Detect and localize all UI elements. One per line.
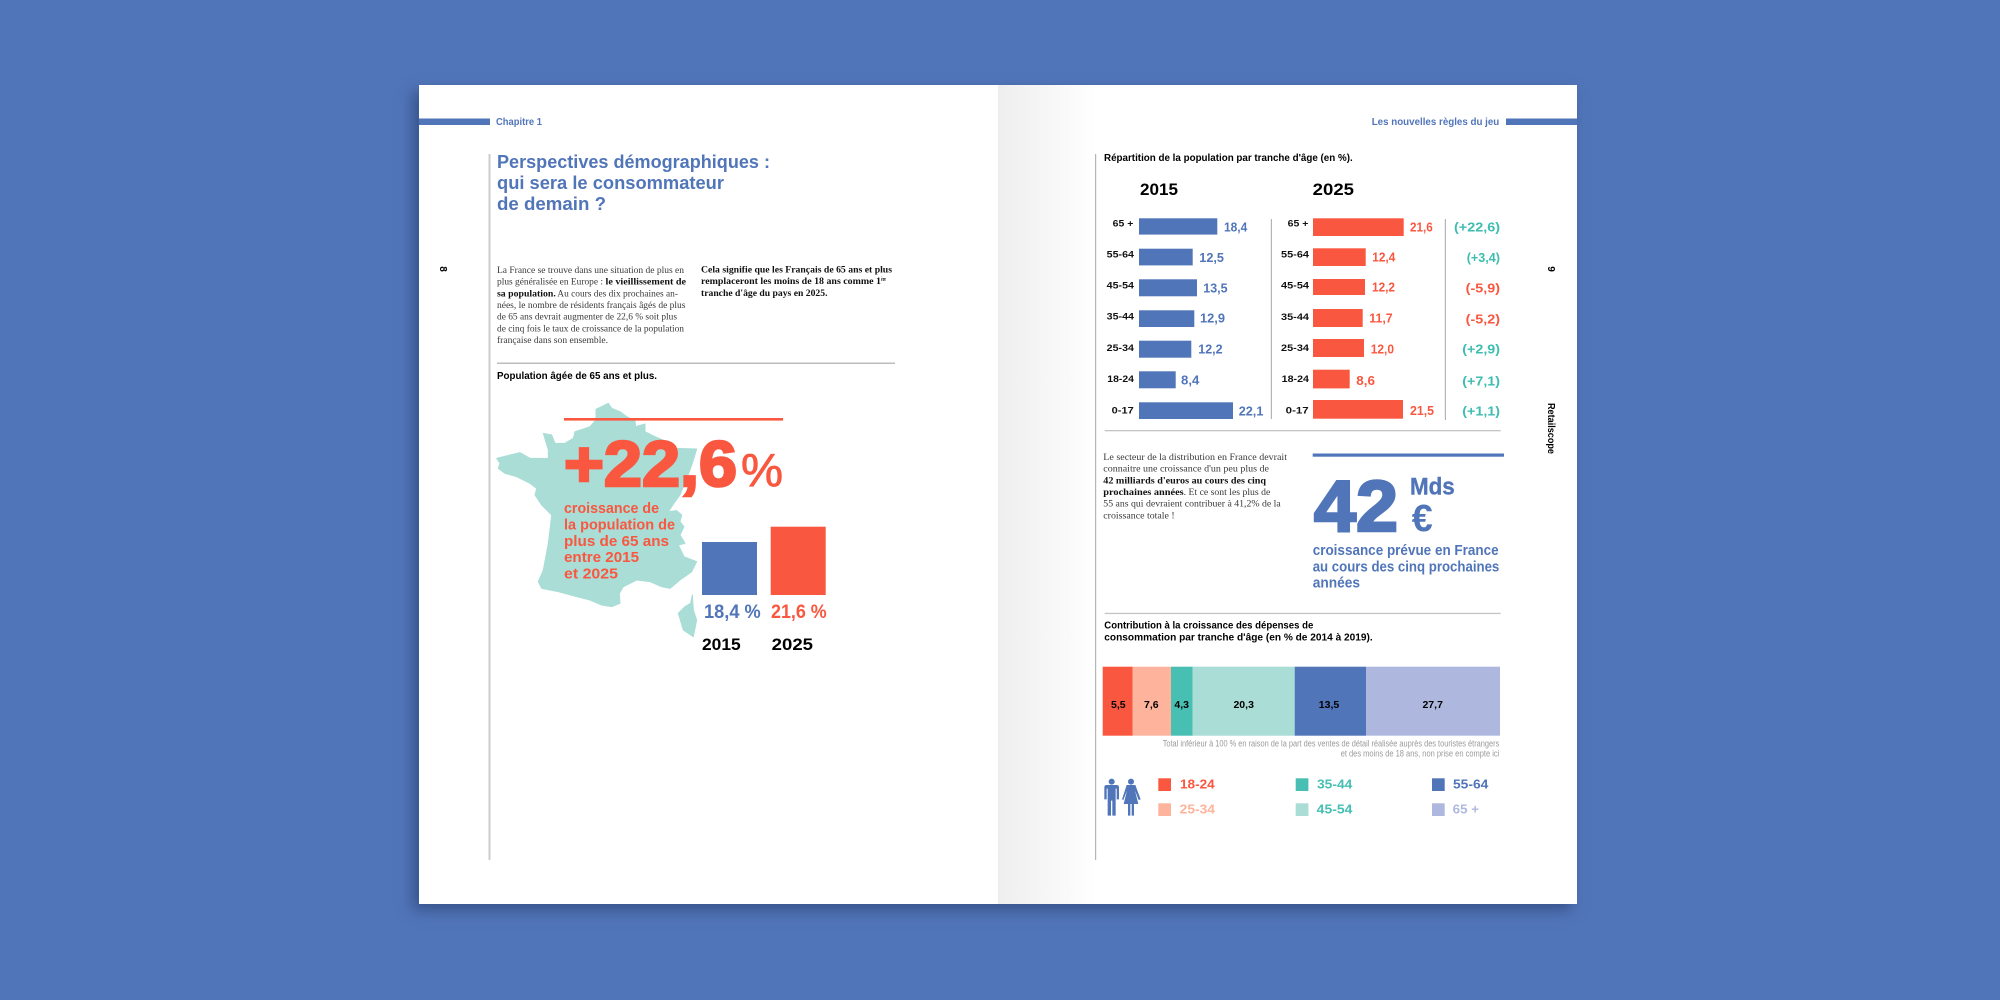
intro text block: plus généralisée en Europe : [497,278,603,288]
intro bold statement: ère [881,277,886,283]
stacked bar chart: 5,5 [1111,699,1126,711]
bar chart: 2025: 55-64 [1281,250,1310,261]
bar chart: 2025: 45-54 [1281,281,1310,292]
divider right bottom [1105,613,1501,614]
change column [1454,220,1500,418]
bar chart: 2025: 25-34 [1281,343,1310,354]
retail text block: prochaines années [1103,488,1184,498]
callout: +22,6% [564,418,783,500]
bar chart: 2015: 18,4 [1224,219,1248,234]
bar chart: 2015: 25-34 [1107,343,1135,354]
heading: contribution chart: Contribution à la croissance des dépenses de [1104,620,1313,632]
intro text block: le vieillissement de [606,278,686,288]
bar chart: 2025: 12,2 [1372,280,1395,295]
left page header: Chapitre 1 [496,117,542,128]
intro text block: de cinq fois le taux de croissance de la population [497,323,684,334]
left page title: de demain ? [497,193,606,214]
bar chart: 65+ share 2015 vs 2025: 2015 [702,635,741,654]
retail text block: 42 milliards d'euros au cours des cinq [1103,476,1267,486]
change column: (-5,2) [1466,311,1500,326]
callout caption [564,501,675,582]
bar chart: 2025: 21,5 [1410,403,1434,418]
change column: (+22,6) [1454,220,1500,235]
stacked bar chart: 4,3 [1174,699,1189,711]
bar chart: 2015: 2015 [1140,180,1178,199]
stacked bar chart: 27,7 [1422,699,1443,711]
callout: 42 Mds €: croissance prévue en France [1313,542,1499,559]
intro text block [497,266,686,346]
callout: 42 Mds € [1313,454,1504,591]
legend: 45-54 [1317,802,1352,816]
stacked bar chart: 7,6 [1144,699,1159,711]
page number 8: 8 [437,266,448,272]
callout caption: croissance de [564,501,659,517]
heading: contribution chart: consommation par tranche d'âge (en % de 2014 à 2019). [1104,631,1373,643]
legend: 18-24 [1180,777,1215,791]
bar chart: 2015: 13,5 [1203,281,1228,296]
bar chart: 65+ share 2015 vs 2025 [702,527,827,654]
divider left [497,362,895,364]
retail text block: connaitre une croissance d'un peu plus de [1103,465,1269,475]
right page vertical rule [1095,154,1096,860]
change column: (+7,1) [1462,373,1500,388]
intro text block: Au cours des dix prochaines an- [557,289,678,299]
heading: population aged 65+: Population âgée de 65 ans et plus. [497,370,657,382]
page sheet [419,85,1577,904]
intro text block: nées, le nombre de résidents français âgés de plus [497,300,686,311]
footnote: et des moins de 18 ans, non prise en compte ici [1341,748,1499,758]
retail text block: 55 ans qui devraient contribuer à 41,2% de la [1103,500,1282,510]
left page title: Perspectives démographiques : [497,151,770,172]
callout caption: entre 2015 [564,550,639,566]
callout: 42 Mds €: années [1313,574,1360,591]
stacked bar chart: 13,5 [1319,699,1339,711]
stacked bar chart: 20,3 [1233,699,1254,711]
footnote [1163,738,1500,758]
legend: 25-34 [1180,802,1215,816]
bar chart: 65+ share 2015 vs 2025: 21,6 % [771,602,827,623]
callout caption: plus de 65 ans [564,534,669,550]
map of France [497,403,697,637]
callout: 42 Mds €: € [1412,498,1433,540]
intro text block: La France se trouve dans une situation de plus en [497,266,684,276]
divider right top [1105,430,1501,431]
intro text block: de 65 ans devrait augmenter de 22,6 % soit plus [497,313,677,323]
bar chart: 2015 [1107,180,1263,419]
brand label: Retailscope [1545,403,1557,454]
retail text block: Le secteur de la distribution en France devrait [1103,453,1287,463]
intro text block: sa population. [497,289,556,299]
bar chart: 2025: 12,4 [1372,250,1396,265]
bar chart: 2015: 65 + [1113,219,1134,230]
bar chart: 65+ share 2015 vs 2025: 2025 [772,635,813,654]
intro bold statement: remplaceront les moins de 18 ans comme 1 [701,277,881,287]
retail text block [1103,453,1287,521]
right page header: Les nouvelles règles du jeu [1372,117,1499,128]
bar chart: 2025: 21,6 [1410,220,1433,235]
bar chart: 2025: 8,6 [1356,373,1375,388]
change column: (-5,9) [1466,280,1500,295]
bar chart: 2025: 11,7 [1369,311,1393,326]
bar chart: 2025: 12,0 [1371,341,1394,356]
icon: man and woman [1104,779,1141,816]
legend: 35-44 [1317,777,1352,791]
heading: distribution by age: Répartition de la population par tranche d'âge (en %). [1104,152,1353,164]
bar chart: 2025: 0-17 [1286,405,1309,416]
retail text block: . Et ce sont les plus de [1184,488,1270,498]
callout: +22,6%: % [741,444,783,496]
callout: 42 Mds €: Mds [1410,473,1455,500]
callout: 42 Mds €: 42 [1314,467,1398,547]
stacked bar chart [1103,667,1500,736]
left page header [419,117,542,128]
intro bold statement [701,266,892,299]
bar chart: 2015: 35-44 [1107,312,1135,323]
bar chart: 2025: 18-24 [1282,374,1310,385]
bar chart: 2025: 2025 [1313,180,1354,199]
bar chart: 2015: 12,9 [1200,311,1225,326]
change column: (+3,4) [1467,250,1500,265]
retail text block: croissance totale ! [1103,511,1175,521]
change column: (+2,9) [1462,342,1500,357]
left page title: qui sera le consommateur [497,172,724,193]
callout caption: la population de [564,518,675,534]
bar chart: 2015: 12,2 [1198,341,1223,356]
callout caption: et 2025 [564,566,618,582]
column rule [1445,219,1446,420]
heading: contribution chart [1104,620,1373,643]
intro bold statement: tranche d'âge du pays en 2025. [701,289,828,299]
footnote: Total inférieur à 100 % en raison de la part des ventes de détail réalisée auprès des touristes étrangers [1163,738,1500,748]
bar chart: 2015: 45-54 [1107,281,1135,292]
legend: 65 + [1453,802,1479,816]
bar chart: 2015: 18-24 [1107,374,1135,385]
column rule [1271,219,1272,419]
callout: 42 Mds €: au cours des cinq prochaines [1313,559,1499,576]
bar chart: 65+ share 2015 vs 2025: 18,4 % [704,602,761,623]
right page header [1372,117,1577,128]
bar chart: 2015: 8,4 [1181,372,1200,387]
center fold shading [998,85,1096,904]
bar chart: 2025: 65 + [1288,219,1309,230]
bar chart: 2015: 0-17 [1112,405,1134,416]
legend [1158,777,1488,816]
bar chart: 2015: 12,5 [1199,250,1224,265]
bar chart: 2025 [1281,180,1434,419]
callout: +22,6%: +22,6 [564,428,737,500]
left page title [497,151,770,214]
change column: (+1,1) [1462,403,1500,418]
intro bold statement: Cela signifie que les Français de 65 ans et plus [701,266,892,276]
bar chart: 2015: 55-64 [1107,250,1135,261]
bar chart: 2025: 35-44 [1281,312,1310,323]
bar chart: 2015: 22,1 [1239,403,1263,418]
legend: 55-64 [1453,777,1488,791]
intro text block: française dans son ensemble. [497,335,608,346]
page number 9: 9 [1545,266,1556,272]
left page vertical rule [488,154,490,860]
